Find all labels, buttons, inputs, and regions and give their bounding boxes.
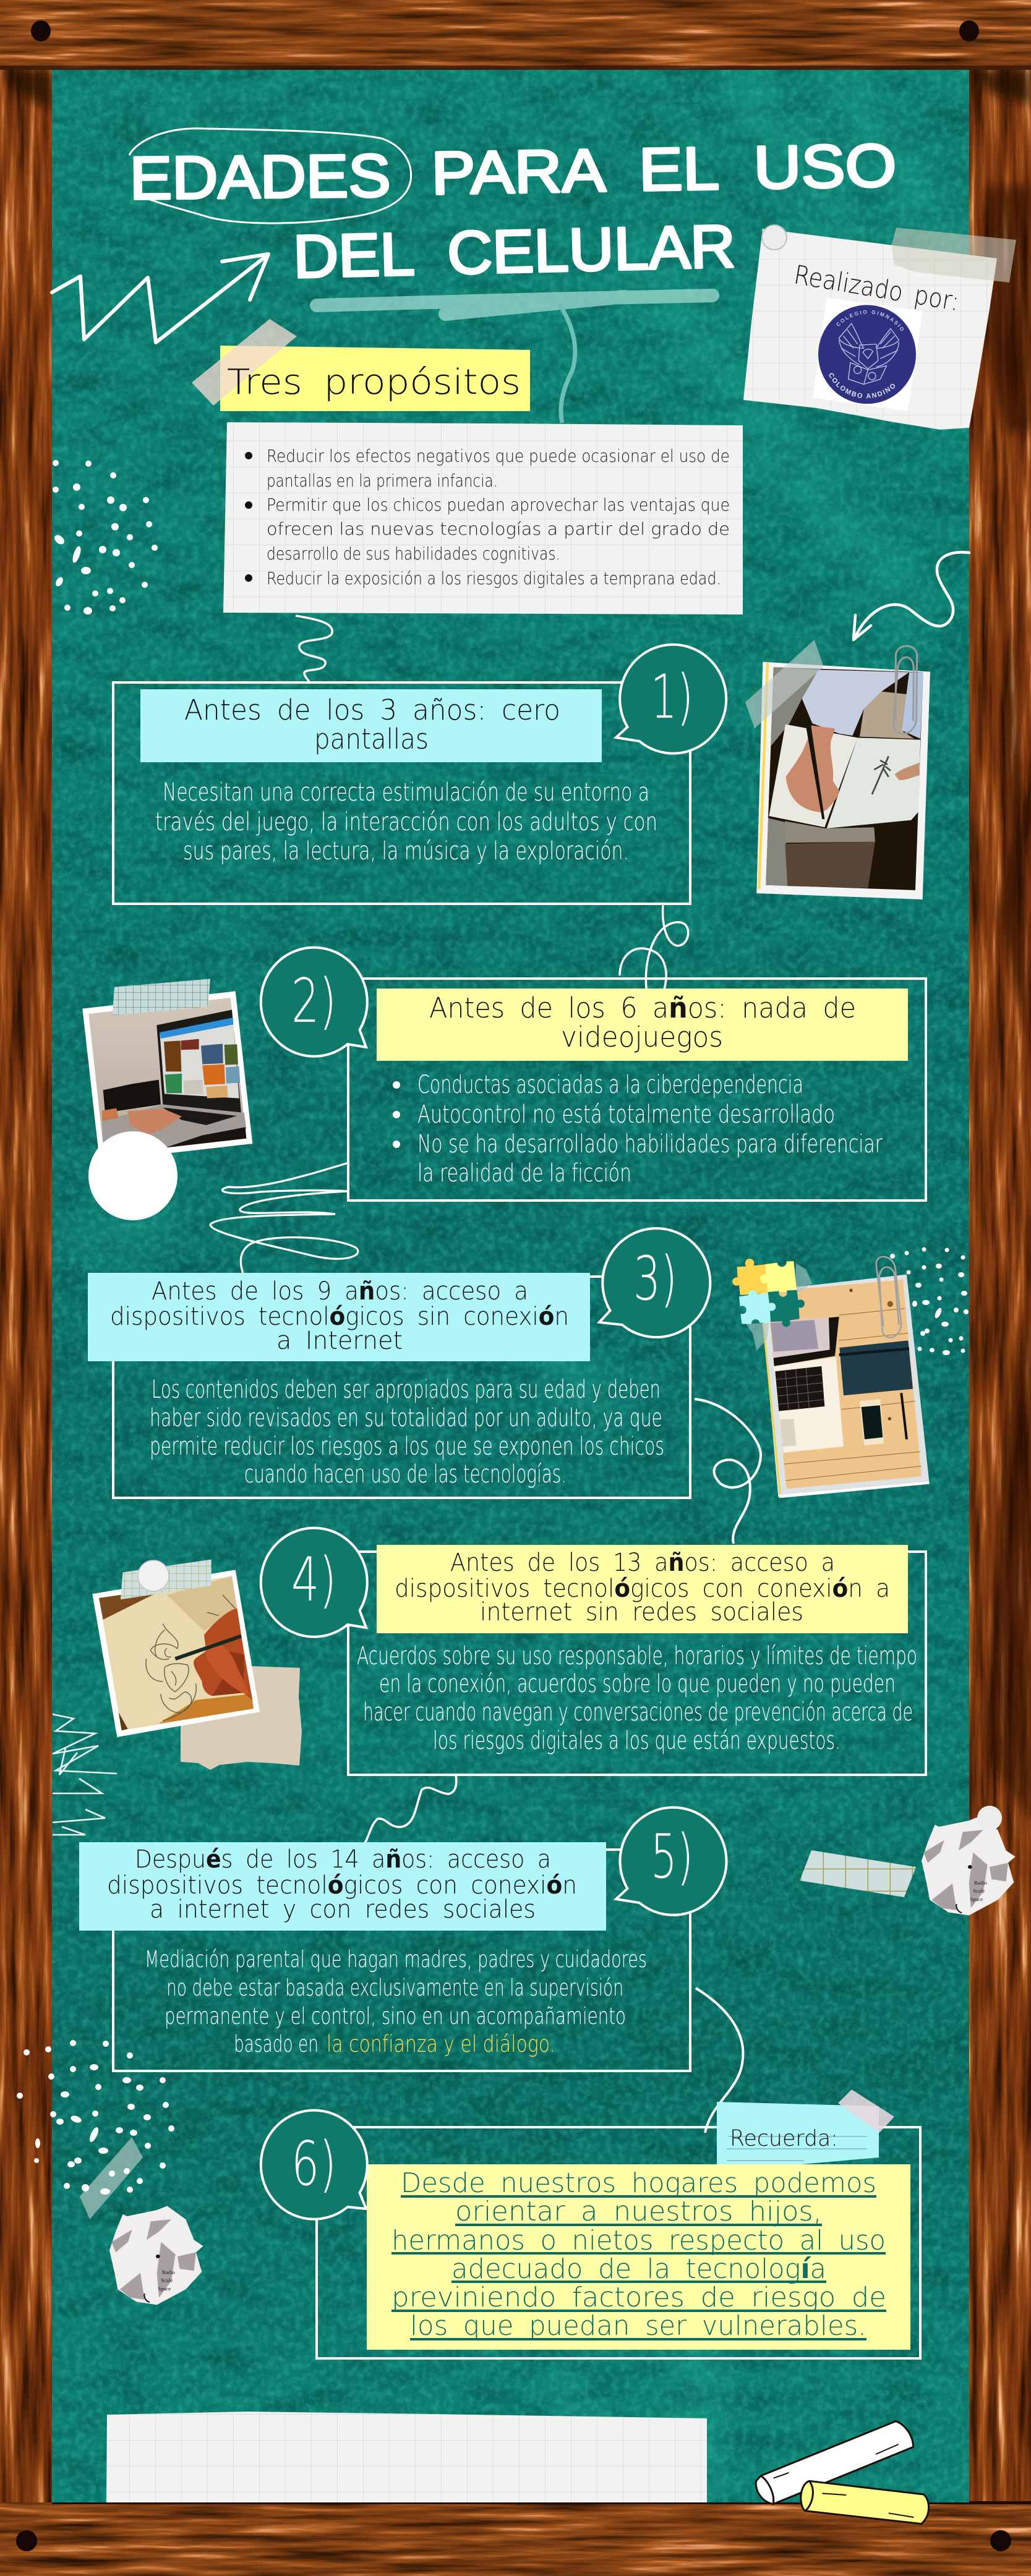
body text [417, 1071, 883, 1188]
decoration: dots top left [53, 460, 158, 614]
decoration: crumpled paper right [922, 1816, 1016, 1915]
body text: Conductas asociadas a la ciberdependencia [417, 1071, 803, 1099]
body text: permanente y el control, sino en un acompañamiento [165, 2003, 626, 2030]
yellow label [220, 346, 530, 411]
heading text [110, 1277, 569, 1355]
number bubble: 5) [651, 1822, 693, 1892]
body text: la confianza y el diálogo. [327, 2031, 555, 2057]
decoration: dots on tape [64, 2168, 143, 2195]
body text: basado en [234, 2031, 319, 2057]
decoration: white scribble lines left [53, 1714, 117, 1835]
step 3 [88, 1228, 710, 1498]
note paper [743, 229, 997, 430]
heading text: Tres propósitos [227, 362, 521, 402]
purposes text: desarrollo de sus habilidades cognitivas. [267, 543, 560, 564]
heading note: Recuerda: Recuerda: [730, 2126, 838, 2151]
connector: curve from step 5 to reminder [696, 1988, 743, 2133]
heading text: Antes de los 6 años: nada de [429, 992, 856, 1024]
box outline [317, 2127, 920, 2358]
decoration: crumpled paper right: Radio [974, 1879, 987, 1885]
heading text: pantallas [314, 723, 429, 755]
heading text [429, 992, 856, 1053]
white chalk [756, 2421, 913, 2504]
heading text: Después de los 14 años: acceso a [135, 1845, 551, 1874]
heading text: a internet y con redes sociales [150, 1895, 536, 1924]
heading text [184, 694, 560, 755]
decoration: crumpled paper left: Space [158, 2285, 171, 2292]
school logo: COLOMBO ANDINO [829, 373, 895, 398]
body text: Mediación parental que hagan madres, padres y cuidadores [145, 1946, 647, 1973]
photo: laptop [82, 979, 252, 1161]
pin on sketch photo [138, 1560, 169, 1591]
connector: loops between step 1 and step 2 [620, 904, 688, 989]
pin [762, 225, 787, 250]
heading text: dispositivos tecnológicos con conexión a [395, 1575, 890, 1603]
decoration: crumpled paper right: Scale [973, 1888, 985, 1894]
box outline [113, 1850, 690, 2071]
school logo: COLEGIO GIMNASIO [836, 310, 904, 331]
hand drawn ellipse around EDADES [129, 129, 411, 223]
box outline [348, 979, 926, 1201]
heading text: Antes de los 9 años: acceso a [152, 1277, 528, 1306]
photo: hand writing in notebook [745, 640, 930, 899]
title words DEL CELULAR: DEL CELULAR [293, 212, 736, 291]
arrow: zigzag pointing to title [52, 254, 268, 342]
box outline [348, 1552, 926, 1775]
purposes text: Reducir los efectos negativos que puede ocasionar el uso de [267, 446, 730, 466]
body text: no debe estar basada exclusivamente en la supervisión [166, 1975, 623, 2001]
body text: cuando hacen uso de las tecnologías. [244, 1460, 567, 1489]
bullets [245, 452, 252, 582]
body text: Los contenidos deben ser apropiados para su edad y deben [152, 1375, 661, 1404]
number bubble: 4) [291, 1545, 336, 1615]
heading block [377, 1545, 908, 1633]
message block [367, 2164, 910, 2350]
body text: Autocontrol no está totalmente desarrollado [417, 1100, 835, 1129]
body text [150, 1375, 664, 1489]
number bubble [261, 948, 367, 1056]
number bubble [599, 1228, 710, 1337]
heading note: Recuerda [717, 2089, 894, 2172]
connector: squiggle from step 4 to step 5 [365, 1775, 456, 1843]
heading text: dispositivos tecnológicos sin conexión [110, 1303, 569, 1331]
decoration: crumpled paper right: Space [970, 1896, 983, 1902]
panel: three purposes [223, 422, 743, 614]
message text: los que puedan ser vulnerables. [410, 2310, 866, 2342]
connector: curve from step 3 to step 4 [695, 1399, 761, 1544]
message text: previniendo factores de riesgo de [391, 2282, 886, 2313]
decoration: crumpled paper left [109, 2206, 203, 2305]
tape [192, 319, 297, 406]
connector: squiggle from purposes to first box [296, 616, 332, 682]
body text: sus pares, la lectura, la música y la exploración. [183, 837, 629, 865]
heading block [88, 1273, 590, 1361]
body text: haber sido revisados en su totalidad por un adulto, ya que [150, 1404, 662, 1432]
purposes text: Reducir la exposición a los riesgos digitales a temprana edad. [267, 568, 721, 589]
heading text: videojuegos [561, 1021, 723, 1053]
decoration: dots near photo 3 [890, 1248, 969, 1355]
body text: los riesgos digitales a los que están expuestos. [433, 1727, 841, 1755]
tape on note [892, 227, 1016, 283]
body text: la realidad de la ficción [417, 1159, 631, 1188]
heading text: dispositivos tecnológicos con conexión [107, 1871, 577, 1900]
step 2 [261, 948, 926, 1201]
body text [155, 778, 657, 865]
box outline [113, 682, 690, 904]
heading text [107, 1845, 577, 1924]
title words PARA EL USO: PARA EL USO [430, 131, 897, 207]
bullets [393, 1081, 400, 1148]
photo: desk with laptop and phone [732, 1257, 930, 1498]
title [129, 129, 897, 314]
school logo [813, 298, 923, 411]
number bubble: 6) [291, 2129, 336, 2200]
body text [145, 1946, 647, 2057]
icon: chalk sticks [756, 2421, 929, 2524]
number bubble: 2) [291, 966, 336, 1037]
number bubble [616, 645, 726, 754]
connector: scribble from step 2 to step 3 [210, 1163, 358, 1273]
note: made by [743, 224, 1016, 430]
connector: chalk line to purposes panel [559, 304, 575, 423]
heading text: a Internet [276, 1327, 403, 1355]
heading text: Antes de los 3 años: cero [184, 694, 560, 726]
yellow chalk [801, 2481, 929, 2524]
heading text: internet sin redes sociales [480, 1598, 803, 1626]
purposes text: ofrecen las nuevas tecnologías a partir del grado de [267, 519, 730, 539]
photo: drawing sketch [92, 1560, 260, 1737]
purposes text: pantallas en la primera infancia. [267, 470, 498, 491]
body text: través del juego, la interacción con los adultos y con [155, 808, 657, 836]
step 6: closing message [261, 2089, 920, 2358]
icon: puzzle pieces [732, 1259, 805, 1327]
heading block [140, 689, 602, 762]
pin on crumpled paper [977, 1806, 1002, 1830]
decoration: tape lower left [80, 2137, 143, 2219]
heading text [395, 1549, 890, 1626]
message text: Desde nuestros hogares podemos [401, 2167, 876, 2199]
arrow: curly pointing at photo [853, 552, 969, 640]
decoration: crumpled paper left: Scale [161, 2277, 173, 2284]
heading block [377, 988, 908, 1061]
heading block [79, 1842, 606, 1931]
number bubble [616, 1808, 727, 1915]
box outline [113, 1277, 690, 1498]
number bubble: 1) [651, 662, 693, 733]
note label: Realizado por: [792, 260, 962, 317]
title word EDADES: EDADES [129, 142, 391, 212]
message text [391, 2167, 886, 2342]
heading text: Antes de los 13 años: acceso a [450, 1549, 835, 1577]
step 4 [261, 1528, 926, 1775]
step 1 [113, 645, 726, 904]
chalk underline brush [317, 295, 712, 314]
number bubble: 3) [633, 1244, 677, 1314]
step 5 [79, 1808, 727, 2071]
message text: adecuado de la tecnología [451, 2253, 826, 2285]
bottom graph paper [106, 2412, 707, 2502]
body text: Necesitan una correcta estimulación de su entorno a [163, 778, 649, 807]
message text: hermanos o nietos respecto al uso [391, 2225, 886, 2256]
body text [357, 1642, 917, 1755]
white circle [88, 1131, 178, 1220]
graph paper [223, 422, 743, 614]
number bubble [261, 2111, 367, 2219]
decoration: torn burlap paper [181, 1666, 302, 1770]
body text: permite reducir los riesgos a los que se exponen los chicos [150, 1432, 664, 1461]
purposes text [267, 446, 730, 589]
decoration: crumpled paper left: Radio [162, 2269, 175, 2275]
message text: orientar a nuestros hijos, [455, 2196, 822, 2227]
number bubble [261, 1528, 367, 1637]
purposes text: Permitir que los chicos puedan aprovechar las ventajas que [267, 495, 730, 515]
decoration: graph tape [800, 1850, 916, 1897]
heading: Tres propositos [192, 319, 530, 411]
decoration: dots lower left [17, 2040, 174, 2169]
body text: No se ha desarrollado habilidades para diferenciar [417, 1130, 883, 1158]
